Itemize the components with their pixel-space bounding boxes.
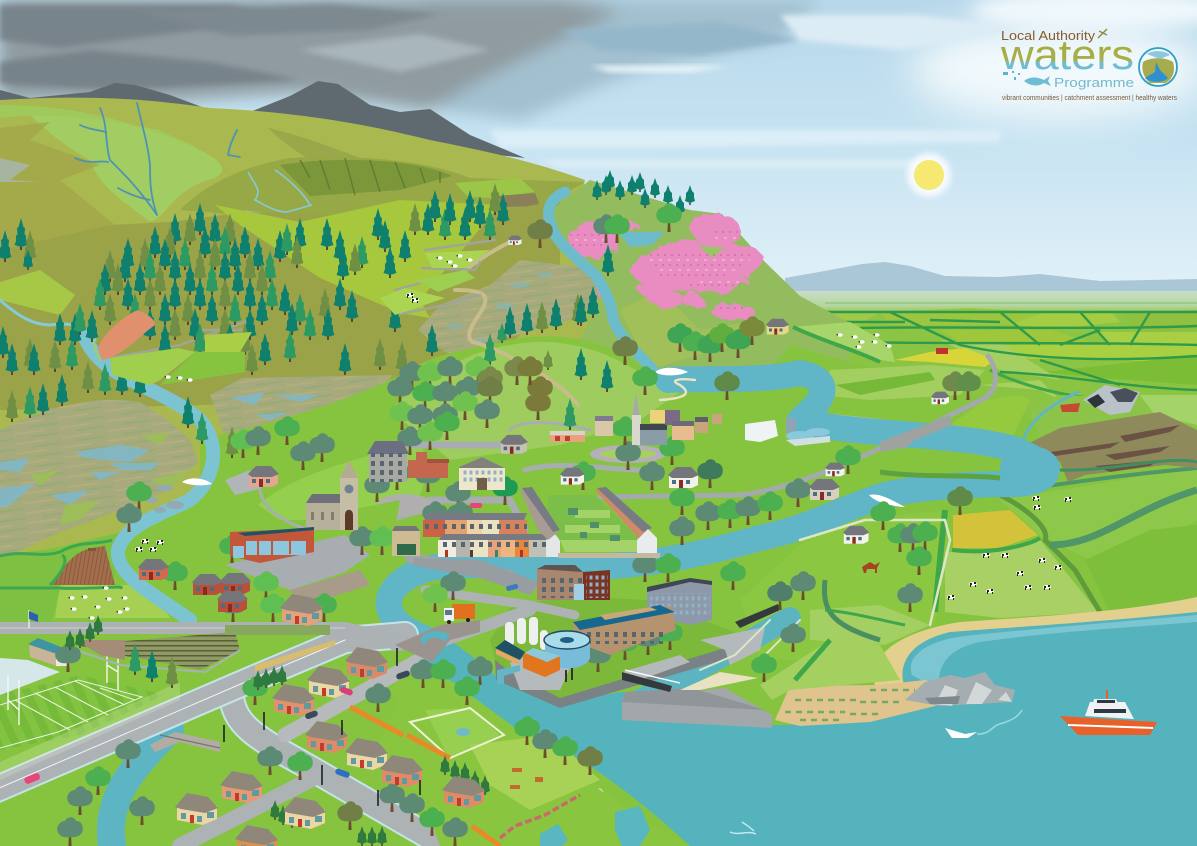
hilltop town: [595, 392, 722, 445]
boats: [730, 690, 1157, 834]
suburb roads edge: [232, 700, 445, 846]
brown-olive flank: [0, 122, 115, 250]
farm complex: [1060, 385, 1140, 415]
fountain: [456, 728, 470, 736]
grey bridge approach: [412, 558, 540, 595]
town centre buildings: [230, 385, 1140, 563]
park path: [500, 790, 603, 846]
club house: [28, 638, 67, 667]
left river cattle: [135, 539, 164, 552]
terrace back row: [423, 513, 527, 537]
icon: tractor small: [88, 548, 96, 551]
ploughed field left: [50, 546, 115, 585]
quay apron left: [622, 655, 690, 680]
blue-roof shed: [495, 640, 525, 665]
dolphin: [730, 822, 756, 834]
suburb park: [350, 680, 690, 846]
industrial island: [490, 596, 765, 708]
river bulge: [1000, 446, 1060, 490]
stream network upper-left: [75, 103, 240, 215]
highland tributaries left: [0, 300, 95, 340]
yellow-green clearing: [215, 200, 500, 318]
cow field: [945, 540, 1098, 618]
upland small fields: [110, 250, 490, 385]
mountain tarn: [618, 232, 665, 247]
hedge strip: [225, 625, 330, 635]
street lamps: [224, 648, 420, 806]
logo heading: Local Authority: Local Authority: [1001, 29, 1096, 43]
mid meadows by the river: [793, 322, 1090, 440]
sea and estuary: [421, 611, 1197, 846]
left slope conifers: [0, 218, 238, 458]
main road: [0, 635, 405, 792]
field hedgerows: [825, 303, 1197, 390]
yellow rape field: [953, 510, 1038, 548]
rhododendron blooms: [562, 214, 762, 320]
lower-left bog: [0, 400, 198, 560]
deciduous groves: [55, 203, 981, 846]
left river rapids: [146, 485, 184, 513]
main river: [389, 373, 1046, 645]
stone field walls: [110, 240, 495, 375]
meltwater streams: [0, 170, 315, 322]
terrace front row: [438, 532, 560, 557]
wispy white clouds: [490, 15, 1020, 168]
central grove: [387, 356, 553, 455]
sheep flock: [165, 254, 473, 382]
main road edge: [0, 635, 405, 792]
light green flank: [30, 115, 222, 222]
housing gardens: [548, 495, 650, 550]
riverside industry: [495, 565, 712, 684]
orange fences: [350, 707, 500, 846]
diagonal terrace right: [595, 488, 650, 540]
central upland bog: [418, 260, 600, 360]
upper pasture: [1000, 470, 1197, 560]
logo tagline: vibrant communities | catchment assessment | healthy waters: [1002, 95, 1177, 102]
beach sand: [874, 597, 1197, 690]
pitch side conifers: [65, 615, 178, 688]
peat workings: [1025, 412, 1197, 482]
pitch lines: [0, 680, 142, 748]
upper tributary: [548, 192, 655, 372]
grey mansion: [367, 441, 409, 482]
bloom speckle: [570, 232, 750, 308]
sports centre: [230, 527, 314, 563]
red shop row: [550, 431, 585, 442]
dune grass: [785, 690, 915, 720]
speedboat: [945, 728, 977, 738]
logo: Local Authority Waters Programme: [1000, 29, 1177, 102]
forested slope ground: [0, 200, 560, 410]
icon: droplets: [1003, 71, 1020, 80]
river rocks and weir foam: [146, 368, 905, 513]
mountain range: [0, 81, 660, 620]
town roads: [410, 558, 510, 575]
left bog grass: [30, 433, 190, 525]
pools: [447, 272, 553, 342]
quay wall: [622, 672, 772, 728]
farm animals: [69, 333, 1072, 620]
railway-side road: [0, 628, 395, 640]
foam: [182, 478, 212, 485]
meadow shading: [258, 440, 425, 540]
blanket bogs: [0, 260, 600, 560]
suburb conifers: [253, 665, 490, 846]
left riverside trees: [55, 416, 337, 672]
garden plots: [560, 510, 640, 552]
left bog pools: [0, 445, 160, 508]
weir top: [735, 604, 780, 628]
far bridge: [880, 415, 952, 452]
white silos: [505, 617, 548, 650]
distant mountains: [785, 262, 1197, 296]
yard: [510, 650, 570, 690]
coastal dune: [760, 640, 960, 726]
grey-blue office block: [647, 578, 712, 625]
second ridge: [180, 157, 585, 220]
red wing: [408, 452, 449, 478]
rocky headland: [905, 672, 1015, 706]
right hand fields: [740, 395, 1197, 660]
orange ferry: [1060, 690, 1157, 735]
footbridge: [150, 732, 220, 752]
workers: [566, 668, 572, 682]
left fields: [0, 530, 130, 595]
car park and plazas: [225, 445, 666, 605]
pub: [392, 526, 420, 556]
rugby posts: [8, 642, 118, 725]
round tank: [544, 631, 590, 668]
river network: [0, 192, 1078, 846]
green slope: [0, 98, 660, 620]
peninsula hedge: [880, 472, 1000, 478]
upper suburb street: [285, 660, 420, 735]
rugby pitch: [0, 675, 165, 750]
farm track: [455, 242, 578, 405]
road network: [0, 240, 996, 846]
suburban houses: [175, 594, 485, 846]
reed beds: [815, 412, 1000, 440]
diagonal terrace left: [520, 488, 558, 540]
allotment plots: [76, 632, 240, 670]
factory trees: [410, 621, 683, 705]
mid bog: [210, 375, 392, 436]
flag: [28, 610, 30, 628]
grey peaks: [0, 83, 210, 110]
cattle herd: [947, 496, 1072, 600]
town trees: [349, 416, 811, 612]
forest upper stand: [398, 183, 510, 262]
icon: fish: [1024, 76, 1051, 86]
white gable: [637, 529, 657, 555]
pale hill meadow: [390, 342, 700, 460]
suburb roads surface: [232, 700, 445, 846]
stone bridges: [150, 415, 952, 752]
logo text: Programme: Programme: [1054, 75, 1134, 90]
icon: dragonfly: [1098, 29, 1107, 38]
mid bog pools: [230, 392, 320, 420]
rock scree with waterfall: [245, 210, 300, 244]
cars: [23, 503, 519, 785]
ponds: [615, 806, 650, 846]
hillside with rhododendron: [545, 180, 850, 400]
hedged fields: [830, 308, 1197, 400]
ridge gullies: [300, 158, 440, 195]
quay apron right: [700, 627, 765, 665]
tractor on plain: [936, 348, 948, 354]
playing pitch and allotments: [0, 610, 335, 780]
water treatment plant: [745, 418, 830, 446]
factory channel: [640, 618, 790, 700]
upper river grove: [517, 203, 981, 474]
picnic benches: [510, 768, 543, 789]
bank meadow: [740, 510, 950, 660]
left river: [84, 335, 213, 620]
right bank trees: [720, 486, 973, 682]
brick mill: [537, 565, 610, 600]
farm yard fields: [1030, 395, 1197, 440]
sun: [907, 153, 951, 197]
plan-left stream: [111, 730, 170, 846]
suburb trees: [57, 676, 468, 846]
big green field: [1085, 525, 1197, 612]
conifer forest: [0, 170, 695, 458]
orange pump house: [523, 648, 560, 677]
clear-felled orange patch: [98, 310, 155, 360]
riverside path: [800, 520, 950, 625]
hedge lines left: [0, 540, 121, 588]
cottages and farm buildings: [138, 235, 950, 612]
weir bottom: [622, 672, 672, 692]
forest right stand: [246, 208, 438, 375]
church: [306, 460, 358, 530]
lorry on bridge: [444, 604, 475, 624]
logo wordmark: Waters: waters: [1000, 31, 1134, 78]
cream hall: [459, 457, 505, 490]
storm clouds: [0, 0, 800, 110]
icon: catchment globe: [1139, 48, 1177, 86]
hilltop conifers: [592, 170, 695, 215]
upper fields and walls: [455, 178, 535, 198]
outfall pipe: [497, 665, 520, 684]
road bridge over river: [395, 620, 480, 662]
patchwork plain: [780, 291, 1197, 581]
flower beds: [500, 795, 580, 838]
sky: [0, 0, 1197, 300]
boat wake: [977, 710, 1022, 734]
factory hall: [573, 605, 676, 655]
garden sheds and shrubs: [568, 508, 620, 541]
upper lane: [660, 379, 695, 400]
pitch fence: [0, 682, 180, 780]
drainage channel: [1022, 392, 1078, 442]
dark hedges: [824, 468, 1197, 640]
shed plot: [558, 553, 660, 558]
park diamond path: [410, 708, 504, 758]
sea wall: [495, 648, 730, 708]
valley floor: [0, 336, 1197, 846]
horse: [862, 562, 880, 573]
sheep in pasture: [69, 333, 892, 620]
forest core: [94, 203, 278, 355]
mid hill conifers: [484, 244, 614, 430]
coast park trees: [514, 716, 603, 775]
